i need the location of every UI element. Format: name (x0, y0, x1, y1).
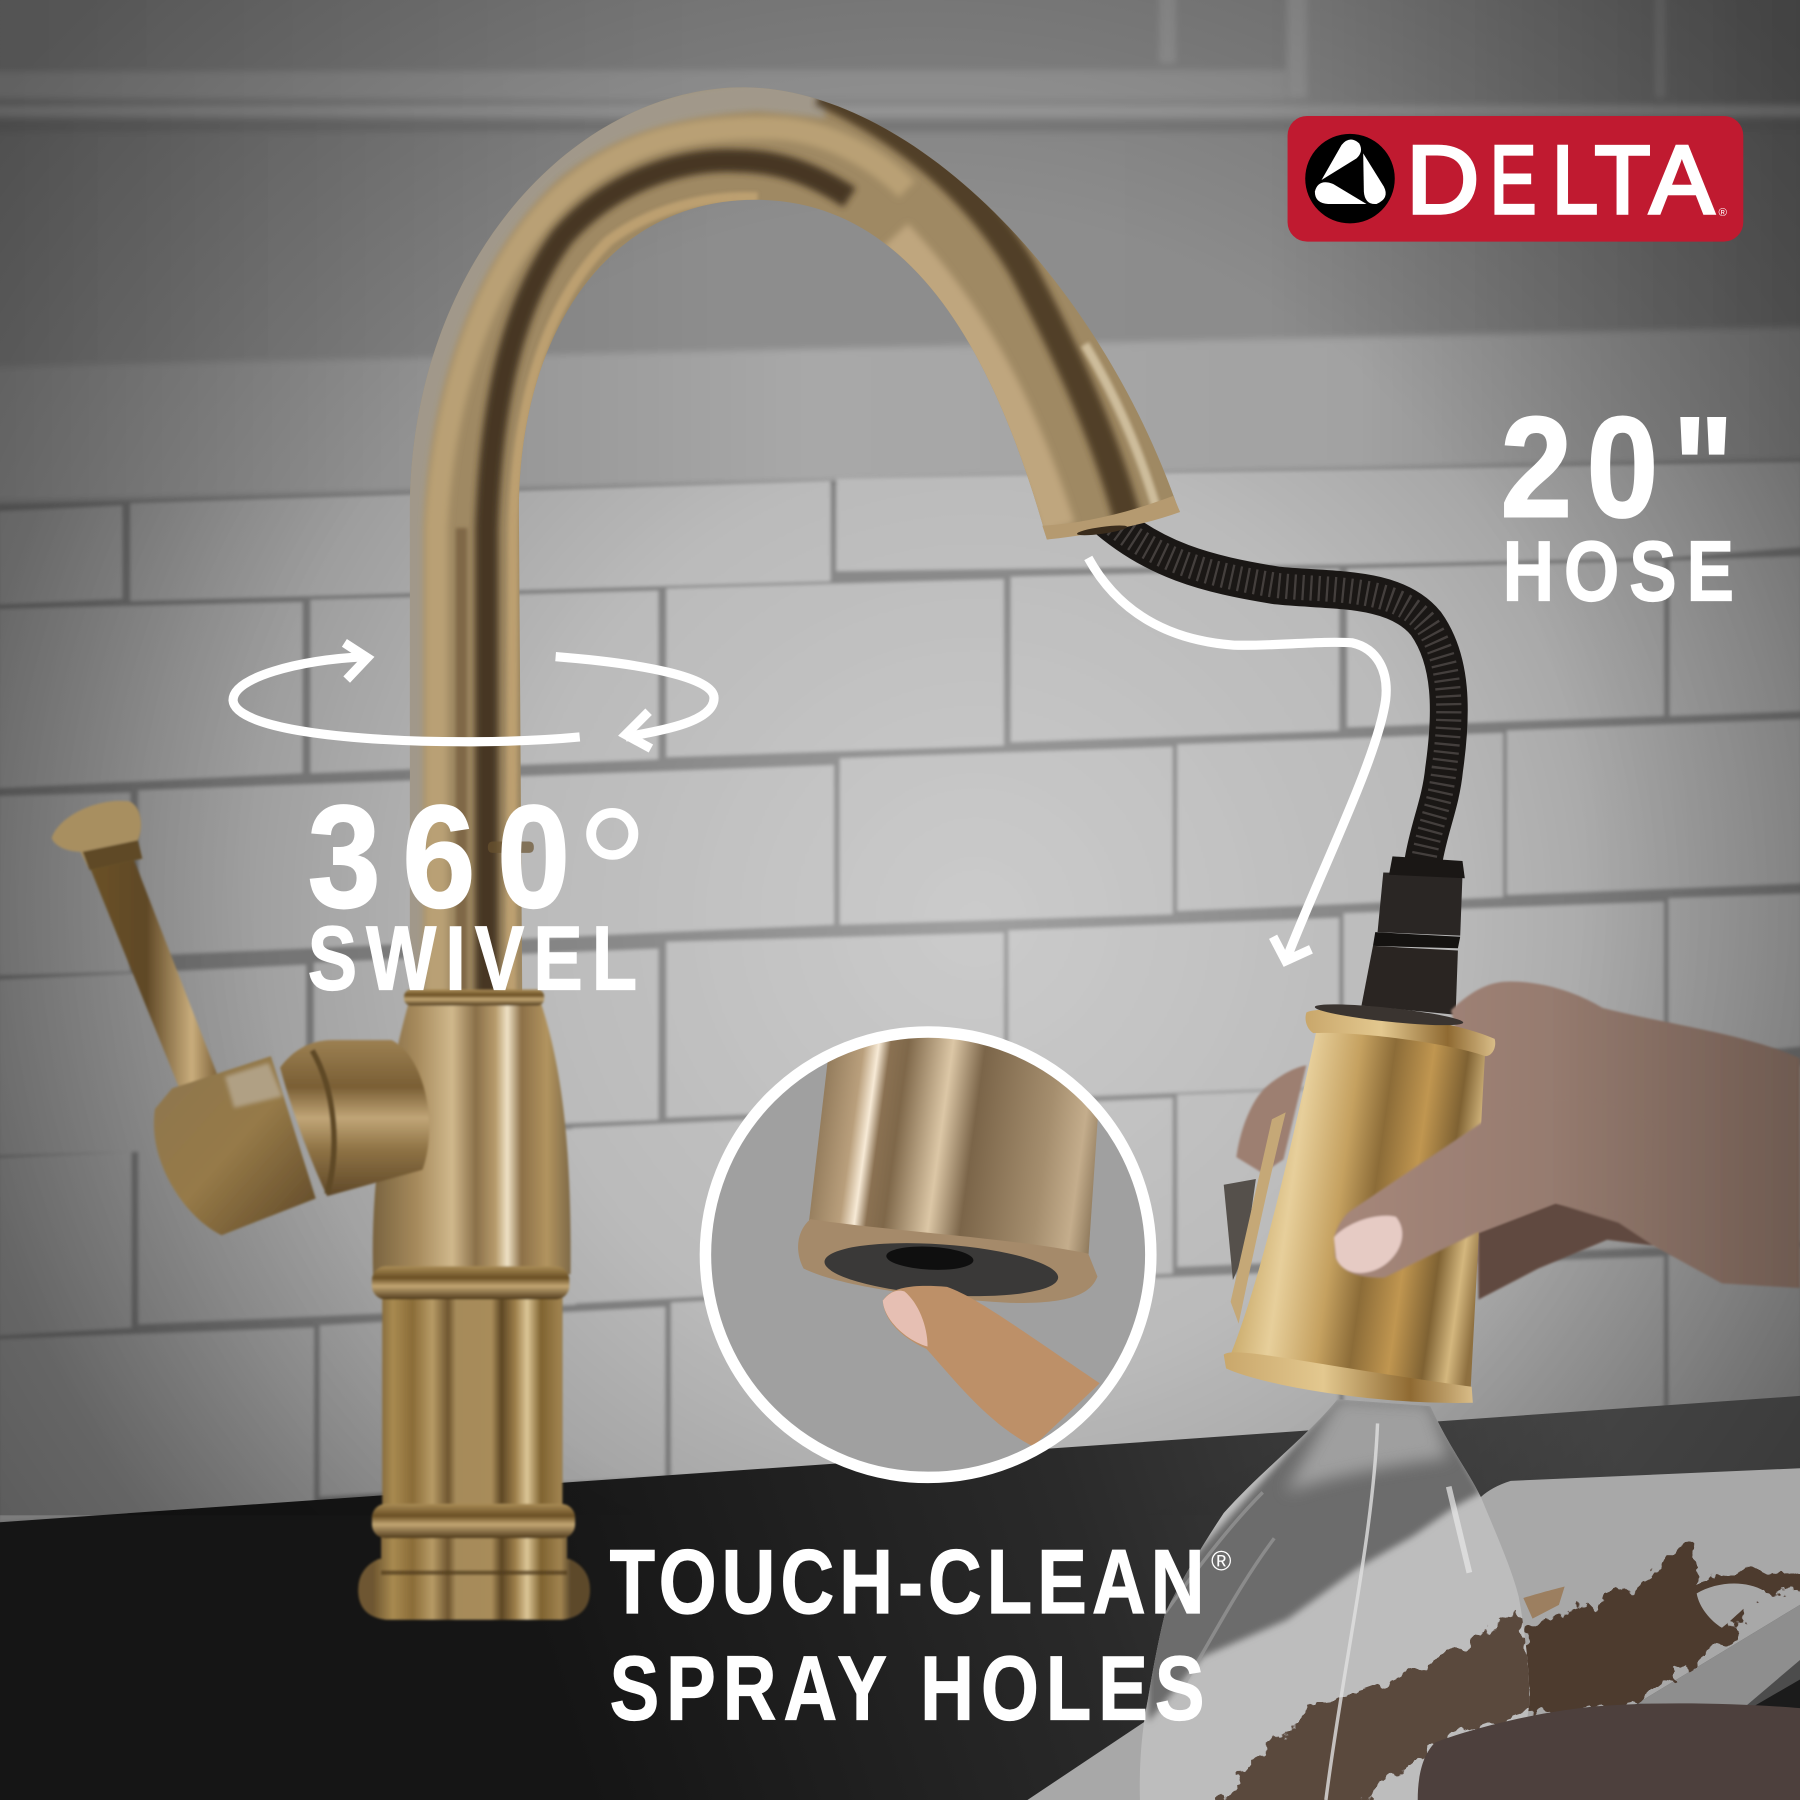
inset center hole (886, 1246, 974, 1270)
logo wordmark (1406, 126, 1715, 234)
logo registered mark: ® (1718, 207, 1727, 219)
inset spray holes (824, 1243, 1058, 1296)
inset spray nozzle body (809, 1038, 1098, 1254)
text: registered mark: ® (1211, 1545, 1231, 1576)
logo wordmark: D (1406, 126, 1479, 233)
background: upper wall and window trim (0, 0, 1800, 517)
arrow: 360 swivel, right arc (556, 657, 714, 748)
logo wordmark: T (1595, 126, 1650, 233)
text: spray holes: SPRAY HOLES (610, 1638, 1204, 1739)
text: hose: HOSE (1503, 523, 1734, 619)
text: 20 inch: 20" (1500, 386, 1734, 547)
pull-down spray head (1224, 1000, 1495, 1403)
arrow: 360 swivel, left arc (233, 643, 580, 742)
logo triangle mark (1315, 140, 1386, 204)
text: swivel: SWIVEL (308, 908, 637, 1009)
countertop (0, 1396, 1800, 1800)
baking dish with chocolate residue (1027, 1468, 1800, 1800)
inset fingertip (883, 1286, 1100, 1446)
logo wordmark: E (1490, 126, 1536, 234)
logo wordmark: L (1552, 127, 1598, 234)
text: 360 degrees: 360 (308, 775, 570, 938)
text: touch-clean: TOUCH-CLEAN (610, 1531, 1204, 1633)
faucet: body and base (358, 990, 590, 1620)
hand thumb with nail (1334, 1098, 1653, 1278)
background: subway tile wall (0, 459, 1800, 1538)
second hand foreground (1418, 1703, 1800, 1800)
inset nozzle rim (798, 1219, 1097, 1303)
braided pull-down hose (1102, 514, 1465, 1015)
arrow: hose pull-down path (1088, 558, 1386, 961)
logo wordmark: A (1650, 127, 1715, 234)
hand fingers behind spray head (1236, 982, 1800, 1299)
faucet: arched spout (390, 69, 1194, 1022)
text: degree mark: ° (575, 771, 650, 978)
logo: Delta (1288, 116, 1743, 242)
faucet: lever handle (52, 801, 429, 1235)
water spray (1131, 1389, 1544, 1800)
inset: touch-clean spray holes (705, 1022, 1151, 1477)
spray head sprayer button (1224, 1179, 1256, 1280)
